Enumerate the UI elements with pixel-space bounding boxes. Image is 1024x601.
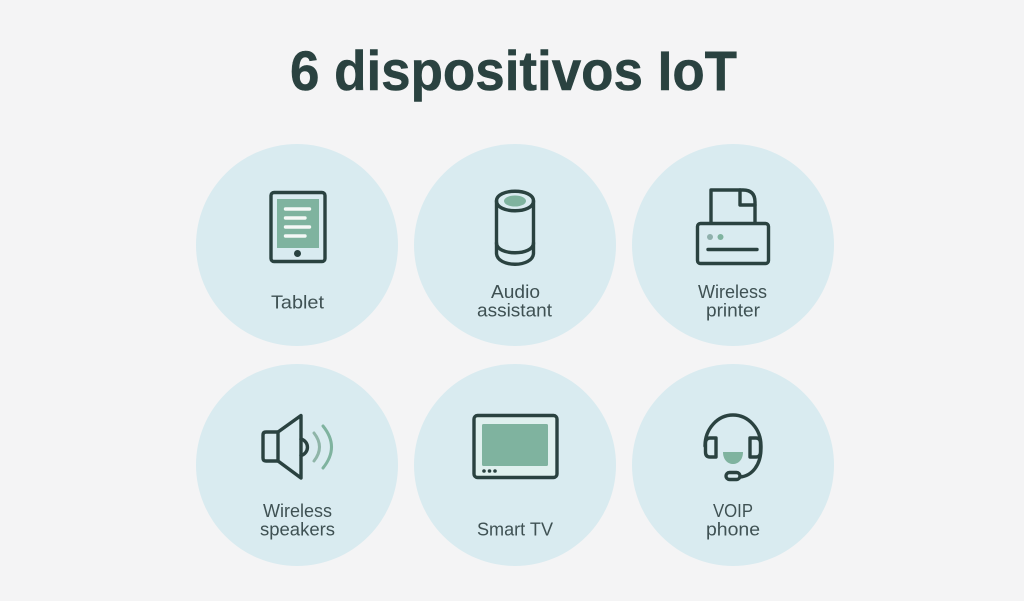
label: audio assistant [477,282,552,320]
panel: tablet [196,144,398,346]
panel: voip phone [632,364,834,566]
icon: wireless printer [698,190,768,264]
label: voip phone [706,501,760,540]
label: wireless printer [698,282,767,320]
icon: tablet [271,192,325,262]
label: wireless speakers: speakers [260,520,335,540]
label: smart tv: Smart TV [477,520,553,540]
label: wireless printer: printer [706,300,760,320]
panel: smart tv [414,364,616,566]
panel: wireless printer [632,144,834,346]
panel: wireless speakers [196,364,398,566]
label: wireless printer: Wireless [698,282,767,302]
icon: audio assistant [496,191,534,264]
title: 6 dispositivos IoT [290,39,737,102]
label: wireless speakers [260,501,335,540]
label: audio assistant: assistant [477,300,552,320]
icon: wireless speakers [263,416,332,478]
label: voip phone: phone [706,520,760,540]
label: wireless speakers: Wireless [263,501,332,521]
icon: voip phone [705,415,761,480]
icon: smart tv [474,416,557,478]
label: audio assistant: Audio [491,282,540,302]
panel: audio assistant [414,144,616,346]
label: voip phone: VOIP [713,501,753,521]
label: tablet: Tablet [271,292,324,312]
